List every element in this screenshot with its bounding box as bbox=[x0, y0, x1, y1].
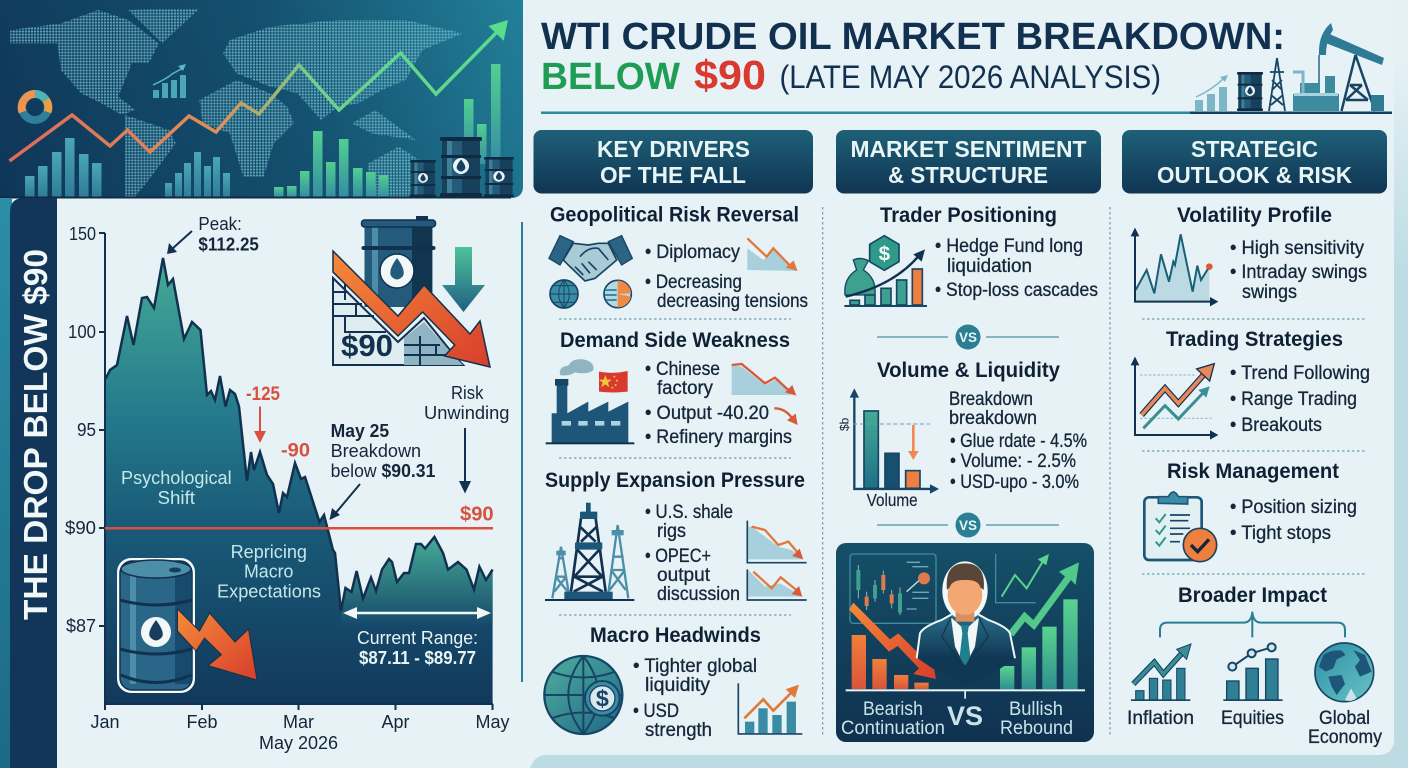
column header: key drivers bbox=[534, 130, 813, 194]
$90 support line: $90 bbox=[460, 504, 494, 526]
icon: barrel breaking $90 wall bbox=[333, 216, 490, 367]
mini chart: falling bbox=[747, 238, 798, 271]
vs divider: VS bbox=[959, 518, 977, 533]
section: volume and liquidity: • Glue rdate - 4.5% bbox=[950, 431, 1087, 452]
icon: globe with dollar bbox=[544, 656, 622, 734]
section: volatility profile: • High sensitivity bbox=[1230, 238, 1364, 259]
section: trader positioning: • Hedge Fund long bbox=[935, 236, 1083, 257]
trader figure bbox=[917, 561, 1015, 687]
section: broader impact: Equities bbox=[1221, 708, 1284, 729]
icon: mini bar chart bbox=[153, 64, 186, 98]
column header: key drivers: KEY DRIVERS bbox=[597, 136, 750, 162]
oil barrels bbox=[410, 137, 514, 197]
impact bracket and icons bbox=[1131, 612, 1374, 702]
current range bbox=[343, 607, 491, 668]
section: demand side weakness: • Refinery margins bbox=[645, 427, 792, 448]
section: broader impact: Economy bbox=[1308, 727, 1382, 748]
icon: inflation bbox=[1131, 644, 1191, 701]
icon: equities bbox=[1223, 643, 1283, 701]
callout: peak bbox=[167, 214, 259, 254]
callout: -90: -90 bbox=[281, 440, 310, 462]
title: BELOW bbox=[541, 56, 680, 98]
vs divider: VS bbox=[959, 330, 977, 345]
y axis labels bbox=[65, 224, 96, 636]
callout: peak: $112.25 bbox=[198, 234, 259, 254]
column header: strategic outlook bbox=[1122, 130, 1387, 194]
section: volatility profile: swings bbox=[1242, 282, 1297, 303]
title: WTI CRUDE OIL MARKET BREAKDOWN: bbox=[541, 16, 1285, 58]
section: trading strategies: • Trend Following bbox=[1230, 363, 1370, 384]
callout: peak: Peak: bbox=[198, 214, 242, 234]
panel: bearish vs bullish scenario: VS bbox=[947, 701, 983, 731]
section: geopolitical risk reversal: • Decreasing bbox=[645, 272, 742, 293]
section: broader impact: Global bbox=[1319, 708, 1370, 729]
callout: May 25 breakdown: Breakdown bbox=[331, 441, 421, 461]
section: volatility profile bbox=[1131, 204, 1367, 306]
label: repricing macro expectations: Expectations bbox=[217, 582, 321, 602]
section: trader positioning: liquidation bbox=[947, 256, 1032, 277]
panel: strategic outlook bbox=[1127, 204, 1382, 748]
callout: May 25 breakdown bbox=[330, 421, 435, 520]
section: risk management: • Tight stops bbox=[1230, 523, 1331, 544]
bar clusters bbox=[25, 138, 230, 197]
y axis labels: 150 bbox=[69, 224, 96, 244]
section: trader positioning: Trader Positioning bbox=[880, 204, 1057, 227]
section: trading strategies: • Breakouts bbox=[1230, 415, 1322, 436]
section: demand side weakness: • Output -40.20 bbox=[645, 403, 769, 424]
section: volume and liquidity bbox=[837, 359, 1087, 510]
title bbox=[541, 16, 1285, 98]
column header: market sentiment: & STRUCTURE bbox=[888, 162, 1048, 188]
section: geopolitical risk reversal: decreasing tensions bbox=[657, 291, 808, 312]
label: repricing macro expectations: Repricing bbox=[231, 542, 307, 562]
x axis labels: Mar bbox=[283, 712, 314, 732]
section: trader positioning bbox=[844, 204, 1098, 307]
vs divider bbox=[877, 512, 1059, 538]
column header: strategic outlook: STRATEGIC bbox=[1191, 136, 1318, 162]
section: demand side weakness: Demand Side Weakness bbox=[560, 329, 790, 352]
column header: market sentiment bbox=[836, 130, 1101, 194]
x axis labels: Jan bbox=[90, 712, 120, 732]
label: repricing macro expectations: Macro bbox=[244, 562, 293, 582]
section: risk management: Risk Management bbox=[1167, 460, 1339, 483]
section: macro headwinds: strength bbox=[645, 720, 712, 741]
section: demand side weakness bbox=[546, 329, 798, 448]
section: macro headwinds: • Tighter global bbox=[633, 656, 757, 677]
section: trader positioning: • Stop-loss cascades bbox=[935, 280, 1098, 301]
x axis labels: Apr bbox=[381, 712, 410, 732]
column header: key drivers: OF THE FALL bbox=[600, 162, 746, 188]
icon: globe with dollar: $ bbox=[596, 686, 609, 712]
section: volume and liquidity: Volume & Liquidity bbox=[877, 359, 1060, 382]
panel: bearish vs bullish scenario: Bearish bbox=[863, 699, 923, 720]
icon: oil rigs bbox=[545, 503, 634, 601]
big red arrow bbox=[849, 603, 936, 679]
section: geopolitical risk reversal: • Diplomacy bbox=[645, 242, 740, 263]
section: volume and liquidity: • USD-upo - 3.0% bbox=[950, 472, 1079, 493]
section: supply expansion pressure bbox=[545, 469, 807, 605]
callout: -125 bbox=[246, 384, 280, 443]
panel: bearish vs bullish scenario: Rebound bbox=[1000, 718, 1073, 739]
label: psychological shift: Psychological bbox=[121, 468, 232, 488]
orange bars bbox=[852, 635, 929, 689]
label: psychological shift: Shift bbox=[158, 488, 195, 508]
title: $90 bbox=[694, 52, 766, 98]
panel: bearish vs bullish scenario: Continuation bbox=[841, 718, 945, 739]
icon: volatility chart bbox=[1131, 228, 1218, 306]
x axis labels: May 2026 bbox=[259, 733, 338, 753]
icon: clipboard with check bbox=[1144, 492, 1217, 562]
column header: market sentiment: MARKET SENTIMENT bbox=[850, 136, 1086, 162]
sidebar title band bbox=[0, 198, 57, 768]
icon: barrel with falling arrow bbox=[117, 558, 257, 693]
section: volatility profile: • Intraday swings bbox=[1230, 262, 1367, 283]
icon: money bag and rising bars bbox=[844, 236, 927, 307]
sidebar title band: THE DROP BELOW $90 bbox=[18, 249, 55, 620]
callout: risk unwinding: Risk bbox=[451, 383, 484, 403]
x axis labels: Feb bbox=[186, 712, 218, 732]
section: supply expansion pressure: rigs bbox=[657, 521, 686, 542]
hero banner: world map and market chart bbox=[0, 0, 523, 198]
section: volume and liquidity: Breakdown bbox=[949, 389, 1033, 410]
section: trading strategies bbox=[1131, 328, 1370, 440]
callout: May 25 breakdown: May 25 bbox=[331, 421, 389, 441]
vs divider bbox=[877, 324, 1059, 350]
y axis labels: $90 bbox=[65, 518, 96, 538]
section: macro headwinds: Macro Headwinds bbox=[590, 624, 761, 647]
panel: bearish vs bullish scenario: Bullish bbox=[1009, 699, 1063, 720]
panel: bearish vs bullish scenario bbox=[836, 543, 1094, 742]
candlestick screen bbox=[850, 554, 936, 623]
title: (LATE MAY 2026 ANALYSIS) bbox=[780, 59, 1161, 95]
panel: key drivers bbox=[544, 204, 808, 741]
label: repricing macro expectations bbox=[217, 542, 321, 602]
chart area fill and price line bbox=[106, 258, 493, 704]
section: risk management bbox=[1144, 460, 1357, 562]
section: risk management: • Position sizing bbox=[1230, 497, 1357, 518]
mini chart: rising bbox=[738, 683, 802, 734]
scenario illustration bbox=[846, 554, 1085, 699]
label: psychological shift bbox=[121, 468, 232, 508]
section: demand side weakness: factory bbox=[657, 378, 713, 399]
bar chart: volume bbox=[837, 388, 939, 510]
section: broader impact: Inflation bbox=[1127, 708, 1194, 729]
icon: donut chart bbox=[22, 94, 48, 120]
current range: Current Range: bbox=[357, 628, 478, 648]
y axis labels: 100 bbox=[68, 322, 96, 342]
section: trading strategies: Trading Strategies bbox=[1166, 328, 1343, 351]
section: demand side weakness: • Chinese bbox=[645, 359, 720, 380]
section: broader impact bbox=[1127, 584, 1382, 748]
section: macro headwinds bbox=[544, 624, 802, 741]
bar chart: volume: Volume bbox=[867, 490, 918, 510]
chart axes bbox=[99, 233, 493, 710]
section: supply expansion pressure: • U.S. shale bbox=[645, 502, 733, 523]
section: geopolitical risk reversal bbox=[549, 204, 808, 312]
y axis labels: 95 bbox=[77, 420, 96, 440]
section: volatility profile: Volatility Profile bbox=[1177, 204, 1332, 227]
section: supply expansion pressure: Supply Expansion Pressure bbox=[545, 469, 805, 492]
section: volume and liquidity: • Volume: - 2.5% bbox=[950, 451, 1076, 472]
section: trading strategies: • Range Trading bbox=[1230, 389, 1357, 410]
y axis labels: $87 bbox=[66, 616, 96, 636]
panel: price chart bbox=[65, 214, 510, 753]
upward line chart bbox=[996, 554, 1049, 603]
section: supply expansion pressure: output bbox=[657, 565, 711, 586]
section: macro headwinds: liquidity bbox=[645, 675, 711, 696]
icon: factory and flag bbox=[546, 359, 634, 444]
section: supply expansion pressure: • OPEC+ bbox=[645, 546, 711, 567]
callout: May 25 breakdown: below $90.31 bbox=[331, 461, 435, 481]
x axis labels bbox=[90, 712, 510, 753]
section: macro headwinds: • USD bbox=[633, 701, 679, 722]
bar chart: volume: $b bbox=[837, 417, 851, 431]
bracket bbox=[1160, 612, 1345, 637]
icon: handshake, globe and pie bbox=[549, 236, 632, 308]
icon: money bag and rising bars: $ bbox=[879, 243, 891, 266]
icon: barrel breaking $90 wall: $90 bbox=[341, 328, 393, 363]
mini charts: falling bbox=[732, 364, 798, 425]
current range: $87.11 - $89.77 bbox=[359, 648, 476, 668]
column header: strategic outlook: OUTLOOK & RISK bbox=[1157, 162, 1352, 188]
callout: risk unwinding: Unwinding bbox=[424, 403, 510, 423]
rising price line with arrow bbox=[10, 20, 508, 161]
section: supply expansion pressure: discussion bbox=[657, 584, 740, 605]
callout: -125: -125 bbox=[246, 384, 280, 405]
big green arrow bbox=[1008, 562, 1079, 637]
section: broader impact: Broader Impact bbox=[1178, 584, 1327, 607]
x axis labels: May bbox=[475, 712, 510, 732]
mini charts: falling supply bbox=[747, 521, 807, 600]
dotted world map bbox=[10, 8, 463, 197]
icon: oil industry skyline bbox=[1195, 23, 1384, 111]
section: geopolitical risk reversal: Geopolitical Risk Reversal bbox=[550, 204, 799, 226]
icon: strategy chart bbox=[1131, 357, 1218, 440]
section: volume and liquidity: breakdown bbox=[949, 408, 1037, 429]
panel: market sentiment bbox=[836, 204, 1098, 742]
callout: risk unwinding bbox=[424, 383, 510, 494]
icon: globe bbox=[1315, 643, 1374, 702]
green bars bbox=[1000, 599, 1078, 689]
